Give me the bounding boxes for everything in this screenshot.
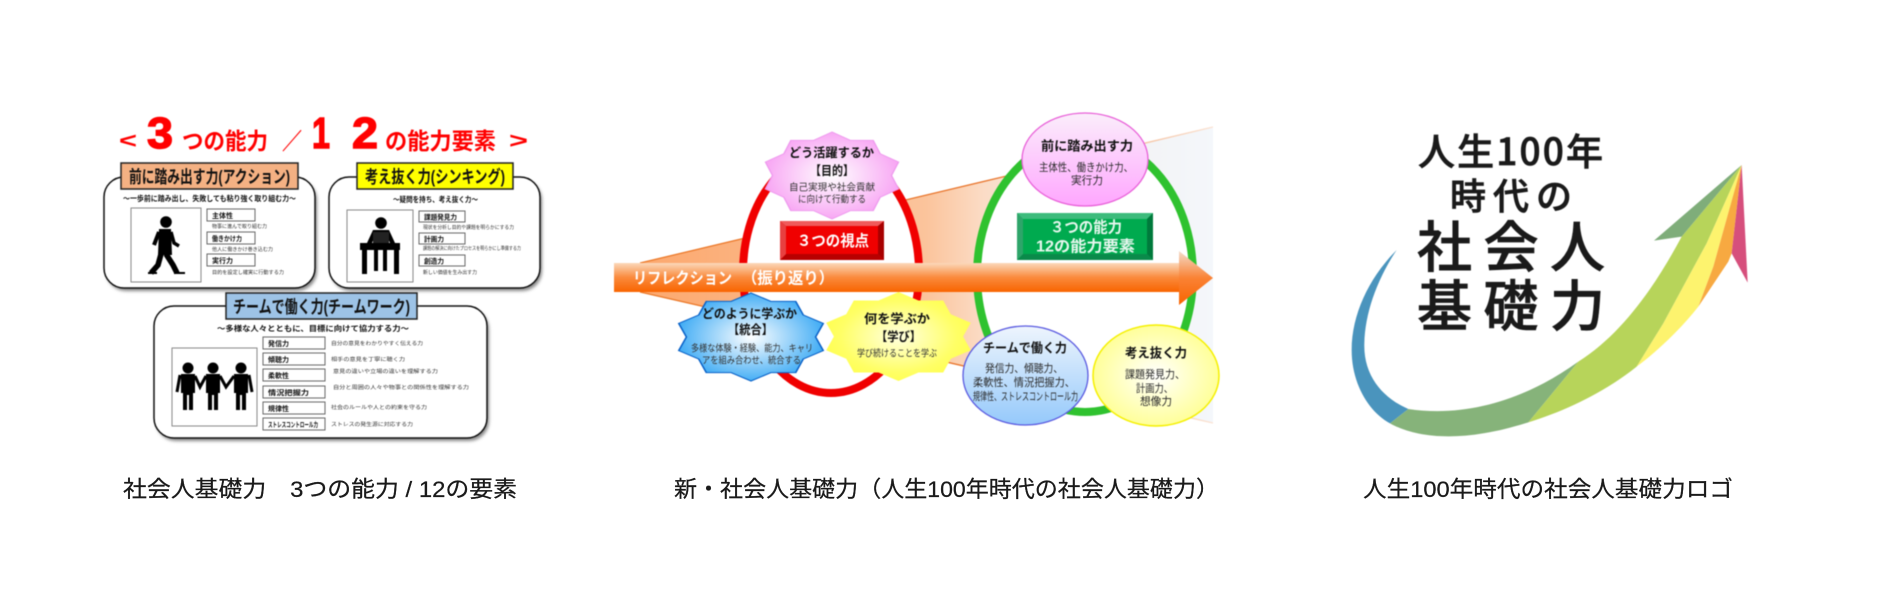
reflection cone xyxy=(640,127,1213,423)
subtitle: action: 〜一歩前に踏み出し、失敗しても粘り強く取り組む力〜 xyxy=(123,193,296,203)
title: 3 abilities / 12 elements: の能力要素 xyxy=(385,128,496,154)
elements: thinking: 課題の解決に向けたプロセスを明らかにし準備する力 xyxy=(423,244,521,252)
arrow: reflection: （振り返り） xyxy=(742,270,834,288)
elements: teamwork: ストレスの発生源に対応する力 xyxy=(331,420,413,428)
ellipse: thinking xyxy=(1093,325,1219,426)
icon: walking person xyxy=(131,208,201,282)
panel: teamwork xyxy=(154,293,489,441)
box: three abilities, twelve elements: ３つの能力 xyxy=(1050,218,1122,236)
elements: thinking: 創造力 xyxy=(424,256,444,266)
elements: action: 主体性 xyxy=(212,211,233,220)
red ring: three perspectives xyxy=(743,151,919,393)
ellipse: thinking: 想像力 xyxy=(1140,394,1172,408)
star: integration xyxy=(679,293,823,381)
logo title text: 社会人 xyxy=(1417,203,1605,283)
elements: teamwork: 自分と周囲の人々や物事との関係性を理解する力 xyxy=(333,383,469,391)
heading: teamwork: チームで働く力(チームワーク) xyxy=(233,297,410,317)
ellipse: teamwork xyxy=(963,326,1088,425)
ellipse: thinking: 考え抜く力 xyxy=(1125,346,1187,360)
title: 3 abilities / 12 elements: 3 xyxy=(147,109,173,158)
elements: teamwork: 相手の意見を丁寧に聴く力 xyxy=(331,355,405,363)
star: integration: どのように学ぶか xyxy=(702,306,797,321)
star: learning xyxy=(826,292,971,381)
caption: middle: 新・社会人基礎力（人生100年時代の社会人基礎力） xyxy=(674,477,1219,502)
title: 3 abilities / 12 elements: ／ xyxy=(282,128,302,154)
star: learning: 学び続けることを学ぶ xyxy=(857,346,937,360)
subtitle: teamwork: 〜多様な人々とともに、目標に向けて協力する力〜 xyxy=(217,323,409,333)
icon: person at desk xyxy=(347,210,413,282)
star: purpose xyxy=(765,132,899,219)
middle infographic: new fundamental competencies xyxy=(614,113,1219,426)
elements: thinking xyxy=(419,211,521,276)
ellipse: action: 実行力 xyxy=(1071,174,1103,187)
star: integration: アを組み合わせ、統合する xyxy=(702,354,801,366)
elements: action: 働きかけ力 xyxy=(212,234,242,243)
arrow: reflection: リフレクション xyxy=(633,270,732,288)
elements: teamwork: 規律性 xyxy=(268,404,289,413)
logo xyxy=(1352,122,1748,436)
icon: three people holding hands xyxy=(172,348,257,426)
title: 3 abilities / 12 elements: > xyxy=(509,128,528,153)
ellipse: action xyxy=(1022,113,1148,206)
elements: action: 目的を設定し確実に行動する力 xyxy=(212,268,284,276)
logo title text: 時代の xyxy=(1450,168,1572,220)
star: integration: 多様な体験・経験、能力、キャリ xyxy=(691,342,813,354)
elements: teamwork xyxy=(263,337,469,430)
arrow: reflection xyxy=(614,251,1213,305)
panel: thinking xyxy=(329,163,542,291)
heading: thinking xyxy=(357,163,513,189)
panel: action xyxy=(104,163,317,291)
box: three perspectives: ３つの視点 xyxy=(797,231,869,250)
caption: left: 社会人基礎力 3つの能力 / 12の要素 xyxy=(123,477,517,502)
ellipse: teamwork: チームで働く力 xyxy=(983,340,1067,356)
elements: teamwork: 発信力 xyxy=(268,339,289,348)
caption: right: 人生100年時代の社会人基礎力ロゴ xyxy=(1363,477,1733,502)
elements: thinking: 計画力 xyxy=(424,234,444,244)
elements: thinking: 課題発見力 xyxy=(424,212,457,222)
star: purpose: 自己実現や社会貢献 xyxy=(789,180,875,194)
ellipse: action: 主体性、働きかけ力、 xyxy=(1039,160,1133,174)
elements: action: 他人に働きかけ巻き込む力 xyxy=(212,245,273,253)
logo swoosh arrow xyxy=(1352,165,1748,436)
subtitle: thinking: 〜疑問を持ち、考え抜く力〜 xyxy=(393,194,478,204)
ellipse: teamwork: 規律性、ストレスコントロール力 xyxy=(973,389,1078,403)
heading: action xyxy=(121,163,298,189)
logo title text: 基礎力 xyxy=(1417,262,1605,342)
heading: action: 前に踏み出す力(アクション) xyxy=(129,167,290,187)
heading: thinking: 考え抜く力(シンキング) xyxy=(365,167,505,187)
green ring: three abilities xyxy=(977,138,1193,412)
title: 3 abilities / 12 elements: 1 xyxy=(312,109,330,158)
elements: teamwork: 意見の違いや立場の違いを理解する力 xyxy=(333,367,438,375)
star: learning: 【学び】 xyxy=(876,329,921,344)
cone edges xyxy=(640,127,1213,423)
star: integration: 【統合】 xyxy=(728,322,773,337)
star: purpose: どう活躍するか xyxy=(789,145,874,160)
box: three abilities, twelve elements xyxy=(1017,213,1153,260)
elements: thinking: 新しい価値を生み出す力 xyxy=(423,268,477,276)
ellipse: teamwork: 柔軟性、情況把握力、 xyxy=(973,375,1075,389)
ellipse: thinking: 課題発見力、 xyxy=(1125,367,1185,381)
elements: teamwork: ストレスコントロール力 xyxy=(268,420,318,429)
star: learning: 何を学ぶか xyxy=(864,311,931,326)
elements: teamwork: 傾聴力 xyxy=(268,355,289,364)
heading: teamwork xyxy=(226,293,417,319)
elements: teamwork: 社会のルールや人との約束を守る力 xyxy=(331,403,427,411)
elements: thinking: 現状を分析し目的や課題を明らかにする力 xyxy=(423,223,514,231)
title: 3 abilities / 12 elements: つの能力 xyxy=(182,128,268,154)
title: 3 abilities / 12 elements: 2 xyxy=(352,109,378,158)
title: 3 abilities / 12 elements xyxy=(119,109,528,158)
left infographic: 3 abilities and 12 elements xyxy=(104,109,542,441)
ellipse: action: 前に踏み出す力 xyxy=(1041,138,1133,154)
elements: action xyxy=(207,209,284,276)
elements: action: 物事に進んで取り組む力 xyxy=(212,222,267,230)
box: three abilities, twelve elements: 12の能力要素 xyxy=(1036,236,1136,256)
ellipse: thinking: 計画力、 xyxy=(1136,382,1173,395)
ellipse: teamwork: 発信力、傾聴力、 xyxy=(985,361,1063,375)
logo title text xyxy=(1417,122,1605,342)
box: three perspectives xyxy=(780,221,884,260)
elements: teamwork: 情況把握力 xyxy=(268,388,309,397)
star: purpose: に向けて行動する xyxy=(798,192,866,206)
logo title text: 人生100年 xyxy=(1418,122,1603,176)
elements: action: 実行力 xyxy=(212,256,233,265)
elements: teamwork: 自分の意見をわかりやすく伝える力 xyxy=(331,339,423,347)
elements: teamwork: 柔軟性 xyxy=(268,371,289,380)
star: purpose: 【目的】 xyxy=(810,163,854,178)
title: 3 abilities / 12 elements: < xyxy=(119,128,137,153)
